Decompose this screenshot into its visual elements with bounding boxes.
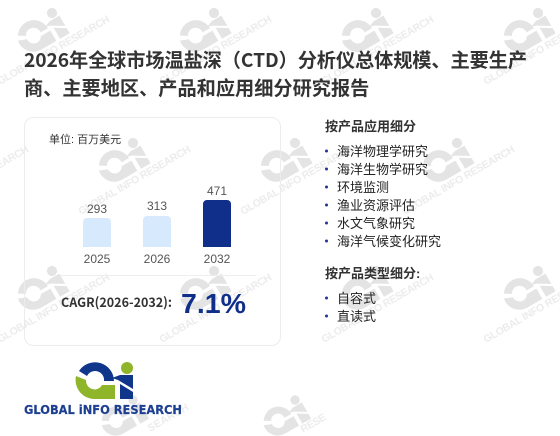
- title: 2026年全球市场温盐深（CTD）分析仪总体规模、主要生产: [24, 45, 527, 73]
- text block: product type segments: 按产品类型细分:: [325, 266, 420, 281]
- text block: application segments: 海洋气候变化研究: [337, 234, 441, 249]
- title: [24, 45, 527, 101]
- CAGR value: 7.1%: [181, 288, 246, 319]
- watermark pattern: RESE: [298, 411, 329, 436]
- watermark pattern: GLOBAL INFO RESEARCH: [158, 13, 274, 88]
- text block: application segments: 环境监测: [337, 180, 389, 195]
- text block: product type segments: 直读式: [337, 309, 376, 324]
- text block: application segments: 海洋物理学研究: [337, 144, 428, 159]
- text block: product type segments: 自容式: [337, 291, 376, 306]
- text block: application segments: 水文气象研究: [337, 216, 415, 231]
- text block: application segments: 按产品应用细分: [325, 119, 416, 134]
- bar chart: 471: [207, 184, 227, 198]
- watermark pattern: GLOBAL INFO RESEARCH: [238, 143, 355, 218]
- bar chart: 313: [147, 199, 167, 213]
- watermark pattern: GLOBAL INFO RESEARCH: [320, 13, 436, 88]
- text block: application segments: 渔业资源评估: [337, 198, 415, 213]
- watermark pattern: GLOBAL INFO RESEARCH: [158, 271, 274, 346]
- bar chart: 2032: [204, 252, 231, 266]
- bar chart: [83, 184, 231, 266]
- bar chart: 293: [87, 202, 107, 216]
- watermark pattern: SEARCH: [146, 401, 191, 435]
- watermark pattern: GLOBAL INFO RESEARCH: [320, 271, 436, 346]
- text block: product type segments: [325, 266, 420, 324]
- watermark pattern: GLOBAL INFO RESEARCH: [76, 143, 193, 218]
- text block: application segments: [325, 119, 441, 249]
- panel: market size chart card: [24, 118, 280, 346]
- CAGR label: CAGR(2026-2032):: [61, 292, 172, 311]
- logo: Global Info Research: [24, 362, 182, 417]
- text block: application segments: 海洋生物学研究: [337, 162, 428, 177]
- bar chart: 2025: [84, 252, 111, 266]
- unit label: 单位: 百万美元: [49, 132, 121, 146]
- logo: Global Info Research: GLOBAL iNFO RESEARCH: [24, 403, 182, 417]
- title: 商、主要地区、产品和应用细分研究报告: [24, 73, 369, 101]
- bar chart: 2026: [144, 252, 171, 266]
- watermark pattern: GLOBAL INFO RESEARCH: [401, 143, 517, 218]
